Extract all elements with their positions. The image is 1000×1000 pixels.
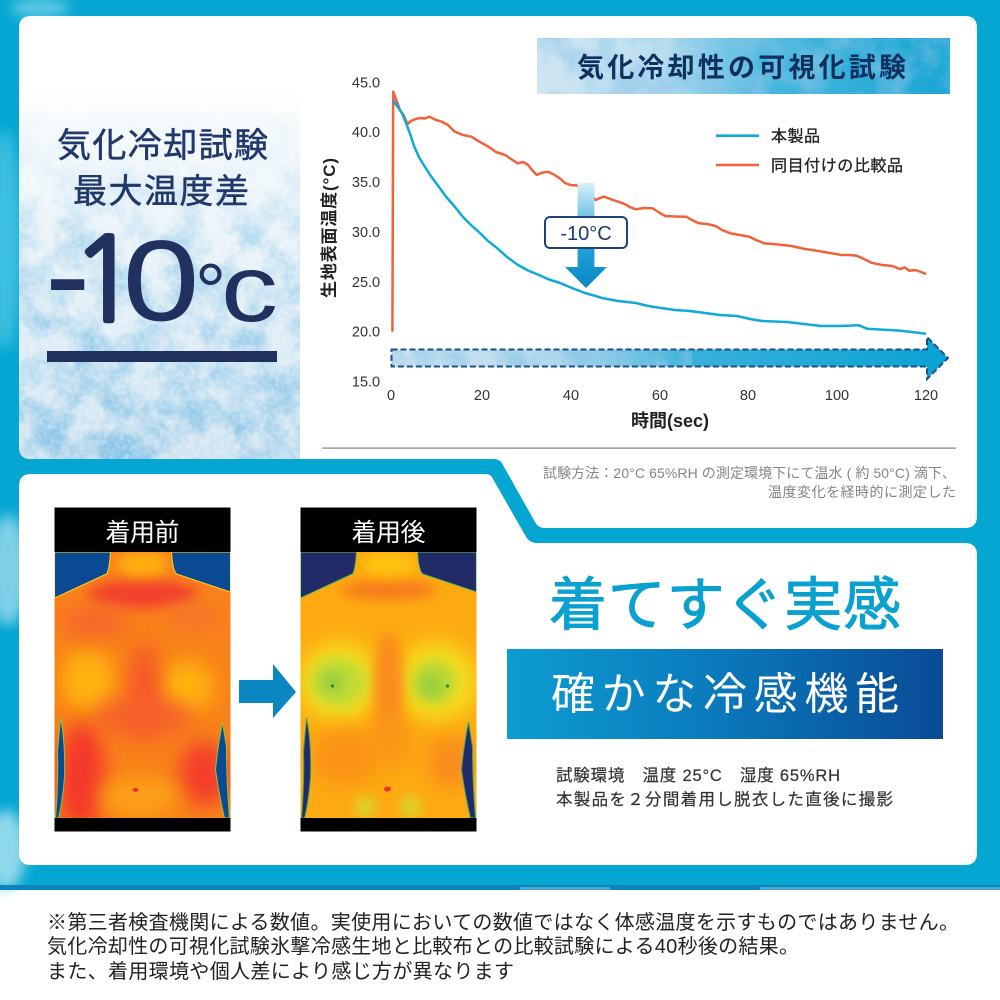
y axis labels: 30.0	[352, 225, 380, 241]
note: test method: 試験方法：20°C 65%RH の測定環境下にて温水 ( 約 50°C) 滴下、	[543, 465, 956, 481]
headline: instant feel: 着てすぐ実感	[549, 573, 901, 638]
x axis labels: 60	[652, 388, 668, 404]
subheading box: reliable cooling function	[507, 649, 943, 739]
big number: -10°C	[46, 217, 278, 344]
big number: -10°C: 0	[123, 217, 199, 344]
arrow: time direction	[392, 337, 948, 379]
big number: -10°C: -	[46, 227, 89, 327]
y axis labels: 45.0	[352, 76, 380, 92]
y axis title: 生地表面温度(°C)	[320, 158, 339, 298]
x axis labels: 0	[387, 388, 395, 404]
label: after: 着用後	[352, 519, 426, 547]
title banner: 気化冷却性の可視化試験	[577, 53, 906, 83]
heading: max temperature difference: 最大温度差	[73, 173, 249, 211]
x axis labels	[387, 388, 938, 404]
panel: wearing comparison (lower)	[19, 474, 977, 865]
x axis title: 時間(sec)	[631, 411, 709, 431]
body heat map	[54, 552, 230, 832]
series: comparison product	[392, 92, 926, 332]
note: test environment: 試験環境 温度 25°C 湿度 65%RH	[556, 766, 840, 785]
body heat map	[298, 552, 478, 818]
note: test method: 温度変化を経時的に測定した	[768, 484, 956, 500]
subheading box: reliable cooling function: 確かな冷感機能	[551, 670, 899, 719]
note: test environment	[556, 766, 894, 809]
y axis labels: 35.0	[352, 175, 380, 191]
y axis labels: 20.0	[352, 324, 380, 340]
panel: frost background with max temperature difference	[19, 85, 300, 460]
x axis labels: 20	[474, 388, 490, 404]
arrow: -10°C difference: -10°C	[560, 223, 612, 245]
footer disclaimer: 気化冷却性の可視化試験氷撃冷感生地と比較布との比較試験による40秒後の結果。	[47, 935, 799, 958]
heading: max temperature difference	[57, 127, 268, 211]
arrow: -10°C difference	[545, 183, 627, 288]
legend: 本製品	[771, 128, 820, 146]
arrow: before to after	[239, 664, 296, 718]
big number: -10°C: c	[221, 236, 278, 342]
footer disclaimer: ※第三者検査機関による数値。実使用においての数値ではなく体感温度を示すものではありません。	[47, 911, 959, 934]
legend	[716, 128, 903, 175]
y axis labels: 25.0	[352, 275, 380, 291]
big number: -10°C: 1	[70, 222, 140, 338]
legend: 同目付けの比較品	[771, 157, 903, 175]
panel: evaporative cooling test (upper)	[19, 16, 977, 528]
y axis labels	[352, 76, 380, 390]
heading: max temperature difference: 気化冷却試験	[57, 127, 268, 165]
x axis labels: 40	[563, 388, 579, 404]
note: test environment: 本製品を２分間着用し脱衣した直後に撮影	[556, 790, 894, 809]
thermal image: before wearing	[54, 508, 230, 832]
x axis labels: 120	[914, 388, 938, 404]
y axis labels: 15.0	[352, 374, 380, 390]
thermal image: after wearing	[298, 508, 478, 832]
series: this product	[393, 100, 926, 334]
footer disclaimer	[47, 911, 959, 983]
note: test method	[322, 448, 956, 500]
x axis labels: 80	[740, 388, 756, 404]
big number: -10°C: °	[195, 247, 226, 335]
label: before: 着用前	[106, 519, 180, 547]
title banner	[537, 38, 950, 94]
line chart: surface temperature over time	[320, 76, 948, 431]
y axis labels: 40.0	[352, 125, 380, 141]
footer disclaimer: また、着用環境や個人差により感じ方が異なります	[47, 960, 514, 983]
x axis labels: 100	[825, 388, 849, 404]
underline	[47, 351, 277, 362]
